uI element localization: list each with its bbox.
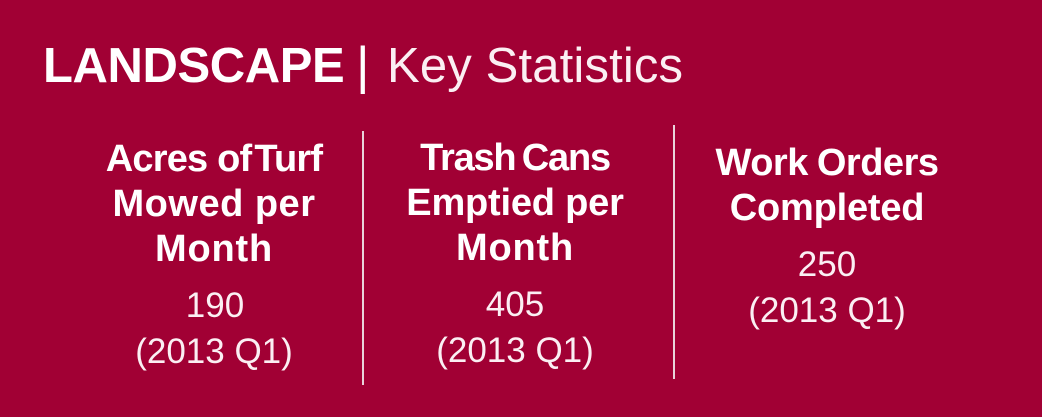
value: trash cans <box>436 285 594 370</box>
heading: work orders <box>716 142 938 229</box>
heading: acres of turf <box>106 138 324 270</box>
heading: trash cans: Emptied per <box>406 182 624 224</box>
divider left <box>362 131 364 385</box>
column: trash cans <box>406 137 624 370</box>
heading: acres of turf: Mowed per <box>113 183 315 225</box>
heading: work orders: Work Orders <box>716 142 938 184</box>
value: work orders: 250 <box>798 245 856 284</box>
heading: trash cans <box>406 137 624 269</box>
title: | <box>356 37 370 95</box>
value: trash cans: 405 <box>486 285 544 324</box>
value: trash cans: (2013 Q1) <box>436 331 594 370</box>
divider right <box>673 125 675 379</box>
heading: acres of turf: Acres ofTurf <box>106 138 322 180</box>
value: work orders: (2013 Q1) <box>748 291 906 330</box>
title: LANDSCAPE <box>43 39 344 93</box>
column: acres of turf <box>106 138 324 371</box>
value: acres of turf: 190 <box>186 286 244 325</box>
value: work orders <box>748 245 906 330</box>
value: acres of turf <box>135 286 293 371</box>
heading: work orders: Completed <box>730 187 924 229</box>
value: acres of turf: (2013 Q1) <box>135 332 293 371</box>
column: work orders <box>716 142 938 330</box>
heading: trash cans: Trash Cans <box>420 137 610 179</box>
title <box>43 37 683 95</box>
heading: trash cans: Month <box>456 227 574 269</box>
title: Key Statistics <box>387 39 683 93</box>
heading: acres of turf: Month <box>155 228 273 270</box>
